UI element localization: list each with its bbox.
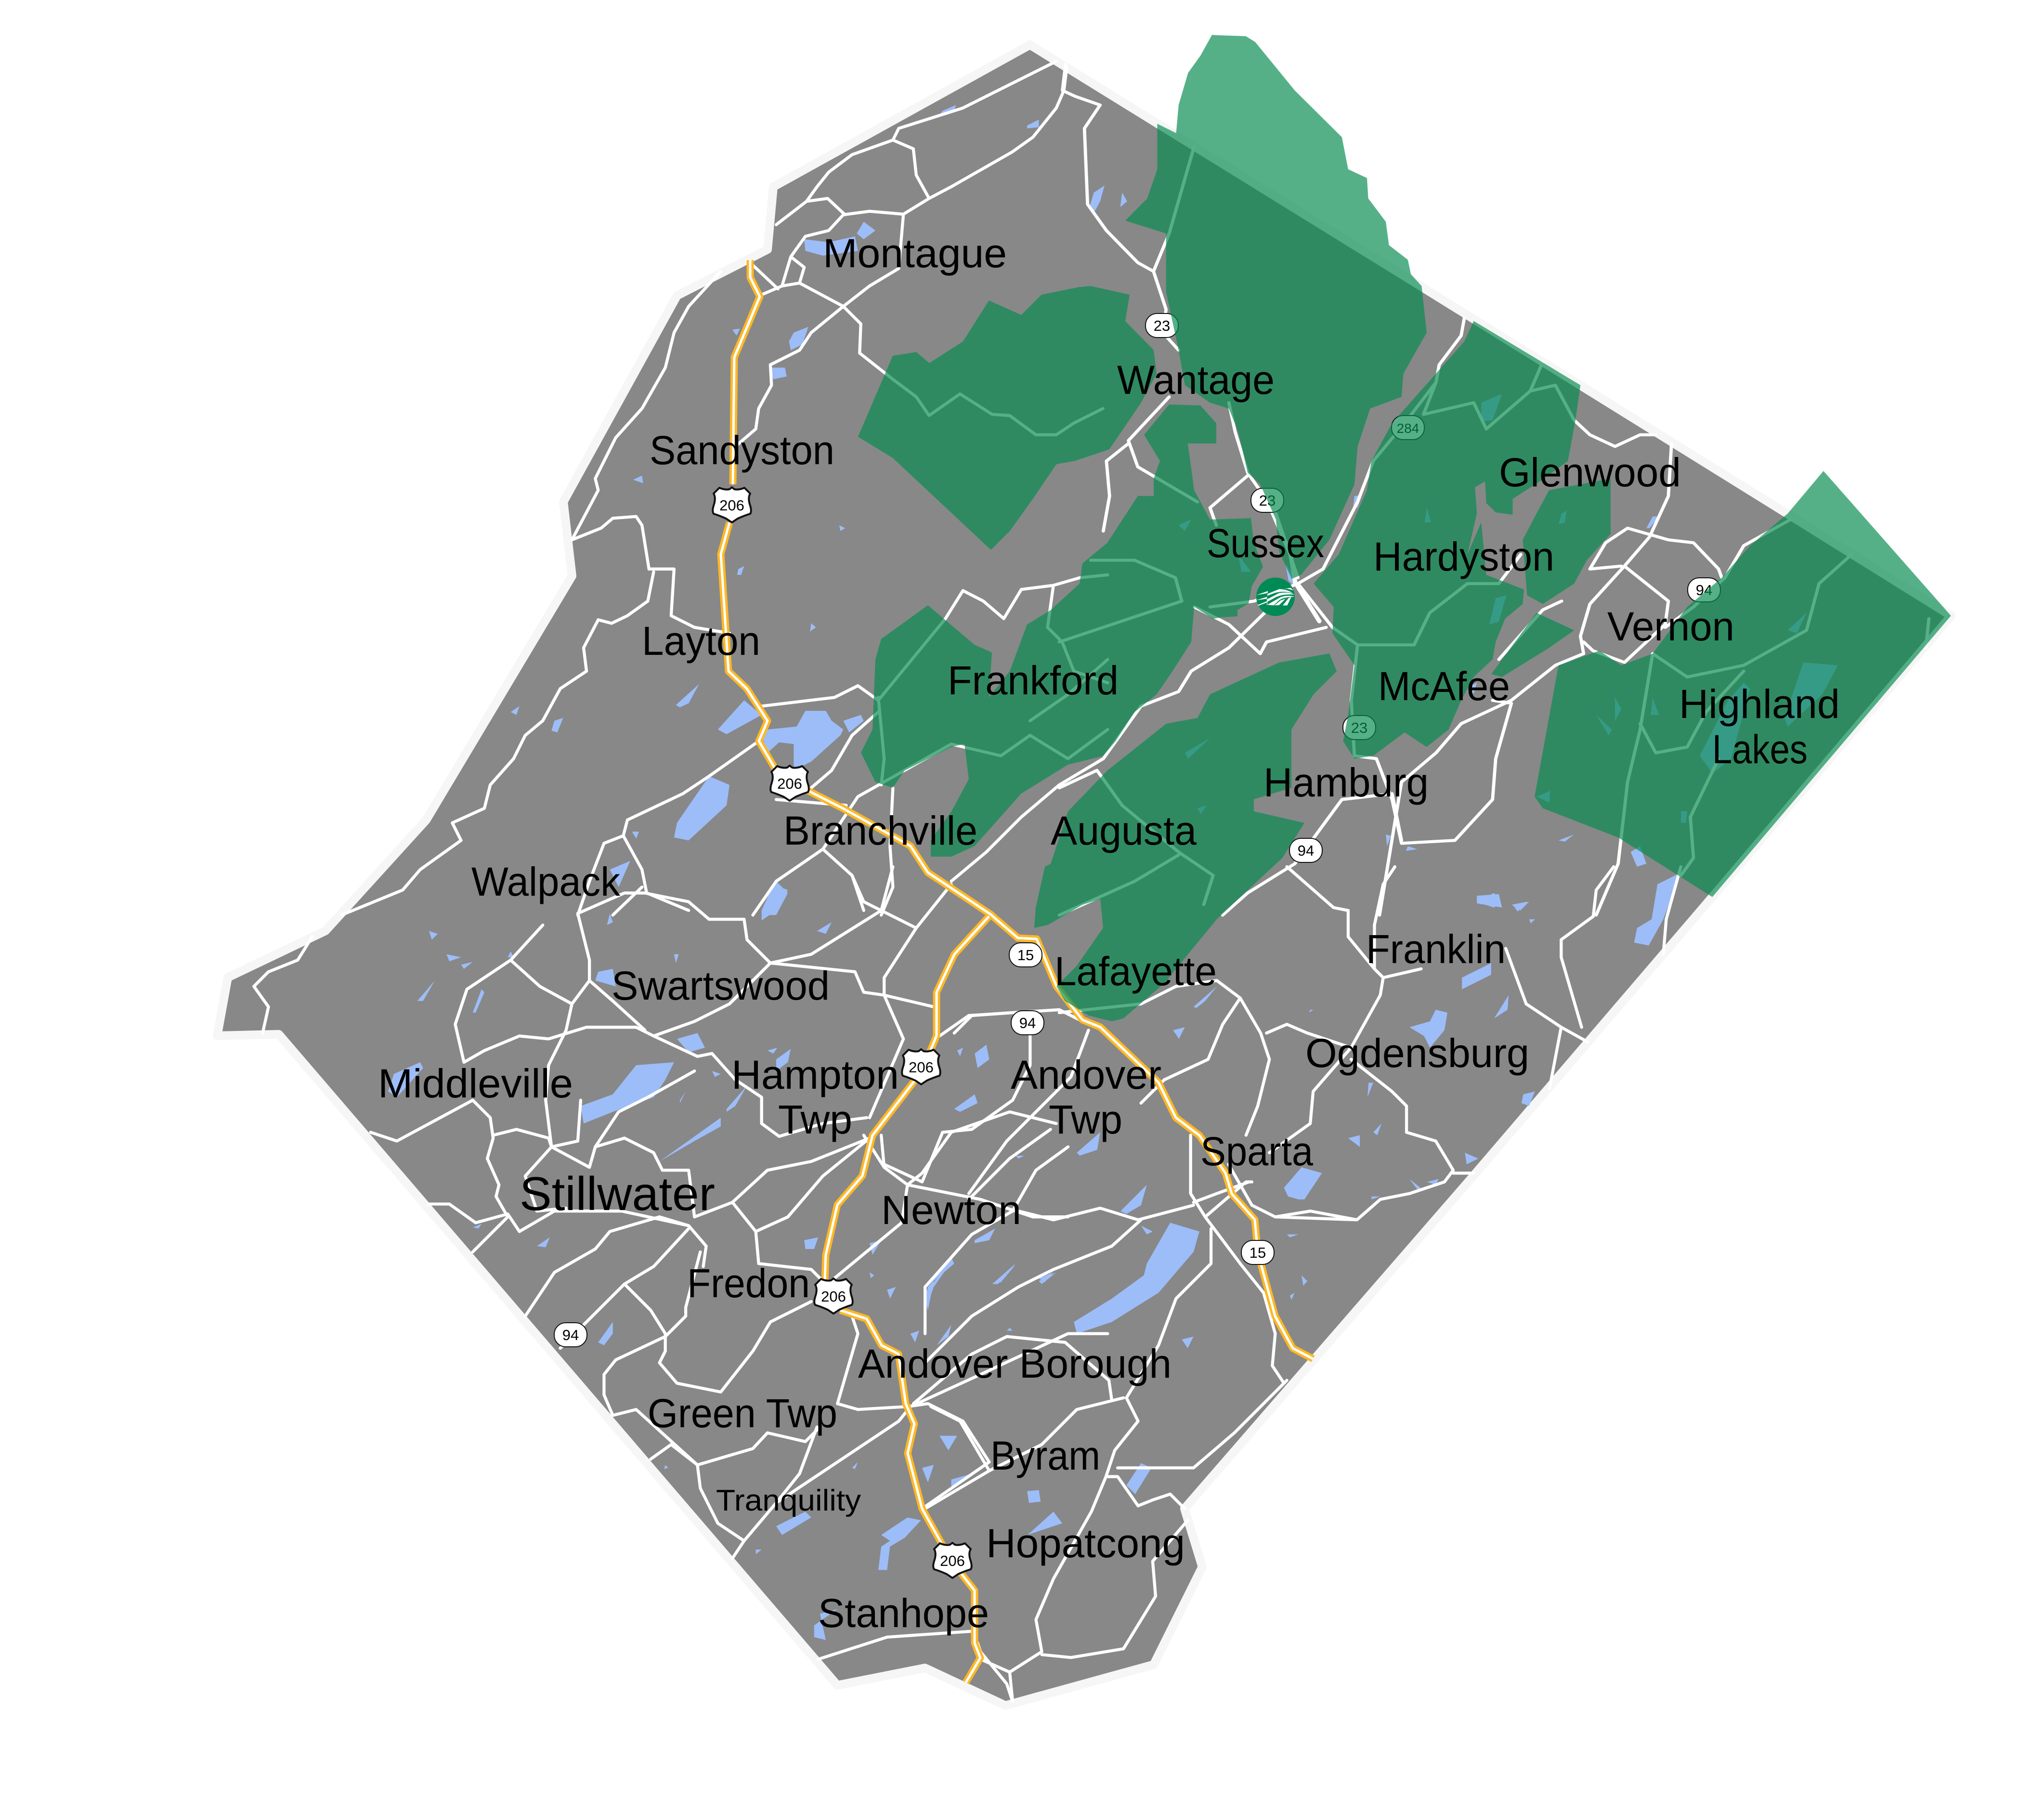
shield: 206 Fredon: 206 [821, 1288, 846, 1305]
marker: 23 Hamburg [1343, 716, 1376, 740]
area: Highland Lakes [1535, 471, 1951, 897]
shield: 206 Hampton: 206 [909, 1059, 934, 1076]
label: Lakes: Lakes [1712, 727, 1808, 772]
area: McAfee sliver [1491, 613, 1574, 677]
label: Hamburg: Hamburg [1263, 760, 1429, 805]
route markers: state routes [554, 313, 1720, 1347]
label: Branchville: Branchville [783, 808, 977, 853]
marker: 284 [1392, 416, 1424, 440]
marker: 94 Hamburg [1289, 838, 1322, 862]
area: north Wantage [1125, 35, 1427, 579]
label: Sandyston: Sandyston [650, 428, 834, 473]
label: Augusta: Augusta [1051, 808, 1197, 853]
label: Wantage: Wantage [1117, 357, 1275, 403]
county base map [217, 45, 1951, 1706]
label: Andover Borough: Andover Borough [858, 1341, 1172, 1386]
label: Sparta: Sparta [1200, 1129, 1313, 1174]
label: Vernon: Vernon [1607, 604, 1734, 649]
marker: 23 Sussex [1251, 488, 1284, 512]
label: Walpack: Walpack [471, 859, 621, 904]
marker: 94: 94 [1019, 1015, 1036, 1031]
shield: 206 Fredon [814, 1278, 853, 1314]
marker: 23 north: 23 [1154, 317, 1170, 334]
label: Byram: Byram [990, 1433, 1100, 1478]
shield: 206 Sandyston: 206 [719, 497, 744, 514]
marker: 15 south: 15 [1250, 1244, 1266, 1261]
label: Hardyston: Hardyston [1373, 534, 1554, 579]
lakes [388, 105, 1838, 1640]
label: Swartswood: Swartswood [612, 963, 830, 1008]
marker: 23 Hamburg: 23 [1351, 719, 1367, 736]
label: Twp (Andover): Twp [1049, 1097, 1122, 1142]
label: Green Twp: Green Twp [648, 1391, 837, 1436]
shield: 206 Stanhope: 206 [940, 1552, 965, 1569]
highway US 206 and Route 15 [721, 260, 1313, 1682]
label: Highland: Highland [1679, 681, 1840, 727]
marker: 94 [1011, 1011, 1044, 1035]
area: Hardyston and Glenwood [1314, 321, 1580, 759]
marker: 23 north [1146, 313, 1178, 338]
area: Augusta and Lafayette [1034, 653, 1337, 1021]
green service-area overlay [858, 35, 1951, 1021]
shield: 206 Hampton [902, 1049, 940, 1084]
area: west Wantage [858, 286, 1157, 550]
cooperative logo [1256, 577, 1295, 616]
label: McAfee: McAfee [1378, 664, 1510, 709]
label: Tranquility: Tranquility [716, 1484, 861, 1517]
shield: 206 Stanhope [933, 1543, 972, 1578]
label: Hopatcong: Hopatcong [986, 1521, 1185, 1566]
area: Frankford and Sussex [861, 404, 1263, 857]
label: Lafayette: Lafayette [1055, 949, 1217, 994]
local roads [254, 61, 1929, 1701]
label: Fredon: Fredon [687, 1261, 810, 1306]
label: Montague: Montague [823, 231, 1007, 276]
marker: 94 south: 94 [562, 1327, 579, 1343]
label: Stillwater: Stillwater [520, 1167, 715, 1220]
label: Middleville: Middleville [378, 1061, 573, 1106]
marker: 94 Hamburg: 94 [1298, 842, 1314, 859]
label: Frankford: Frankford [948, 658, 1119, 703]
marker: 94 Vernon [1688, 578, 1720, 602]
marker: 23 Sussex: 23 [1259, 492, 1276, 509]
label: Ogdensburg: Ogdensburg [1305, 1030, 1529, 1076]
marker: 94 Vernon: 94 [1696, 582, 1712, 599]
label: Layton: Layton [642, 618, 760, 664]
shield: 206 Sandyston [713, 487, 751, 522]
marker: 15: 15 [1017, 947, 1034, 964]
label: Glenwood: Glenwood [1499, 450, 1681, 495]
marker: 15 south [1241, 1240, 1274, 1264]
marker: 284: 284 [1397, 421, 1419, 436]
label: Franklin: Franklin [1366, 926, 1506, 972]
town labels [378, 231, 1840, 1636]
label: Sussex: Sussex [1207, 521, 1324, 566]
label: Stanhope: Stanhope [818, 1590, 989, 1636]
shield: 206 Branchville [770, 766, 809, 801]
marker: 15 [1009, 943, 1042, 967]
label: Andover: Andover [1011, 1052, 1161, 1097]
marker: 94 south [554, 1323, 587, 1347]
shield: 206 Branchville: 206 [777, 775, 802, 792]
area: east of Hardyston [1523, 479, 1611, 604]
label: Newton: Newton [881, 1187, 1021, 1233]
label: Twp (Hampton): Twp [778, 1097, 852, 1142]
label: Hampton: Hampton [731, 1052, 899, 1097]
route markers: US 206 shields [713, 487, 972, 1578]
